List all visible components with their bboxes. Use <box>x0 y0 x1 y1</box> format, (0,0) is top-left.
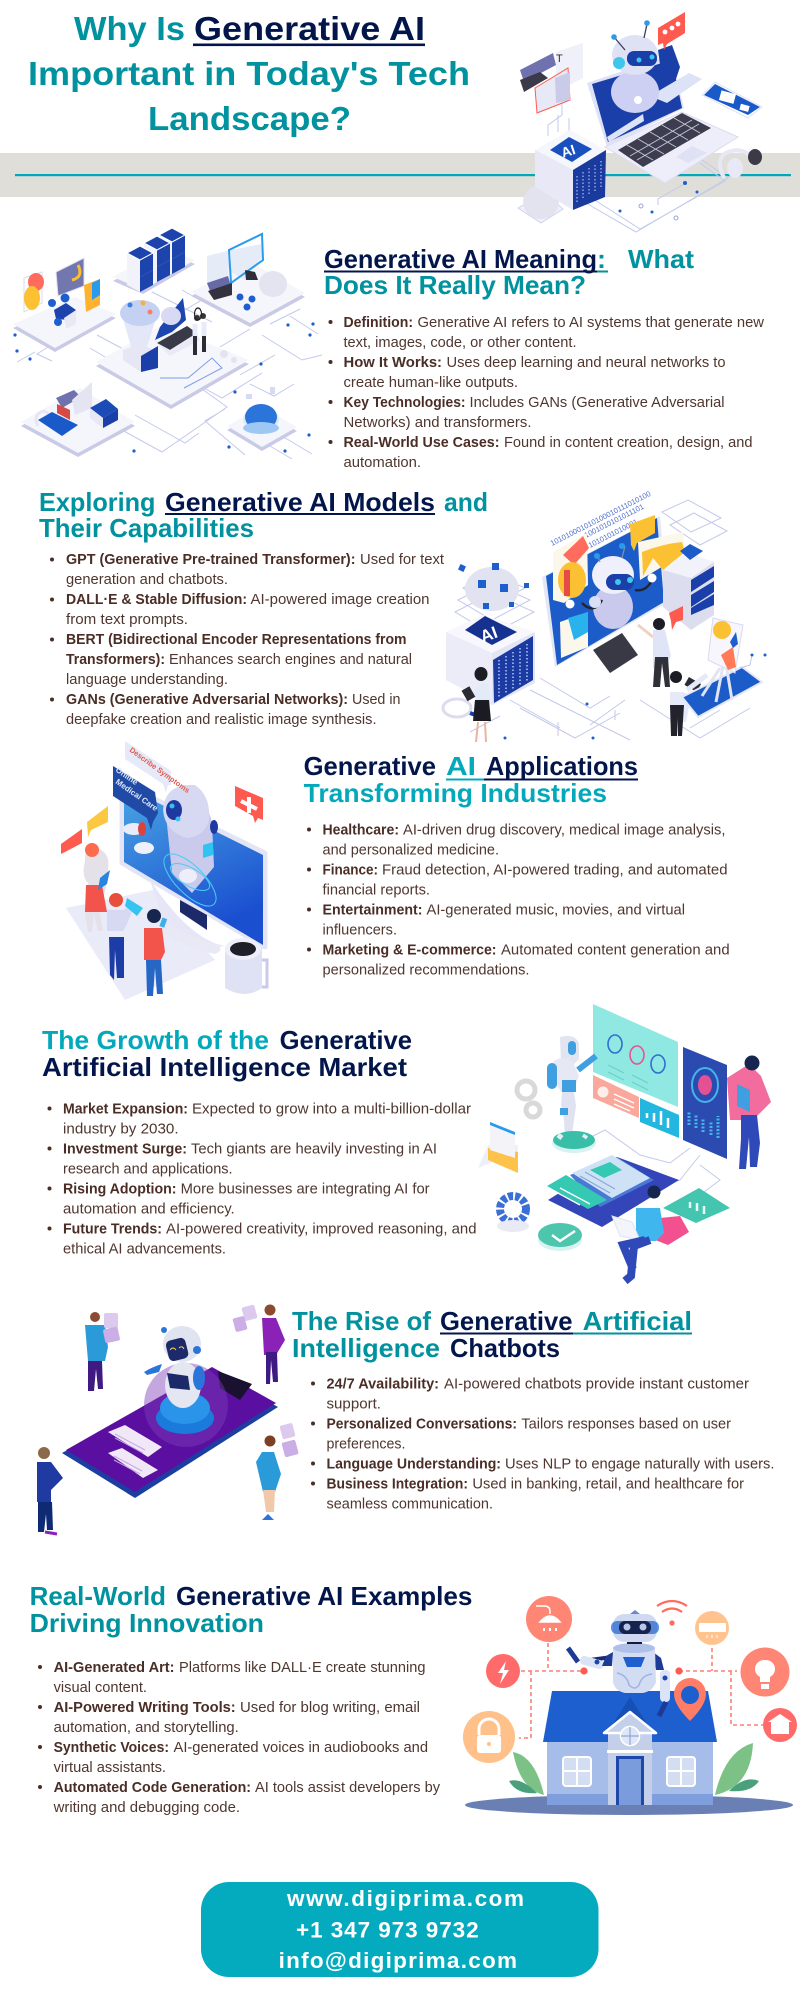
section 5 bullet list: preferences. <box>326 1436 406 1452</box>
section 6 bullet list: AI-generated voices in audiobooks and <box>174 1739 428 1756</box>
section 5 bullet list: Business Integration: <box>326 1476 468 1492</box>
section 1 heading: : <box>597 244 606 274</box>
section 2 heading: Their Capabilities <box>39 513 254 543</box>
section 1 bullet list: create human-like outputs. <box>344 374 518 391</box>
section 3 bullet list: Entertainment: <box>322 902 422 918</box>
section 3 illustration: medical robot monitor: Describe Symptoms <box>128 745 191 795</box>
section 1 bullet list: Generative AI refers to AI systems that generate new <box>418 314 764 331</box>
footer contact panel: info@digiprima.com <box>279 1948 517 1973</box>
section 3 illustration: medical robot monitor: Online <box>114 765 140 787</box>
section 2 bullet list: language understanding. <box>66 671 228 688</box>
section 5 heading: Generative <box>440 1306 572 1336</box>
section 5 heading: Intelligence <box>292 1333 440 1363</box>
section 6 bullet list: Used for blog writing, email <box>240 1699 420 1716</box>
section 3 bullet list: personalized recommendations. <box>322 962 530 978</box>
section 1 bullet list <box>328 314 764 471</box>
section 6 bullet list: AI tools assist developers by <box>255 1779 440 1796</box>
section 4 bullet list: Market Expansion: <box>63 1100 188 1118</box>
section 2 illustration: robot screen and AI cube: 1001010101011101 <box>583 502 645 540</box>
footer contact panel: +1 347 973 9732 <box>296 1918 479 1942</box>
section 2 illustration: robot screen and AI cube: 101010001010100010111010100 <box>549 489 652 548</box>
section 6 heading: Generative AI Examples <box>176 1581 472 1611</box>
section 6 heading: Real-World <box>30 1581 166 1611</box>
section 2 heading <box>39 487 488 543</box>
section 1 heading <box>324 244 694 300</box>
section 4 bullet list: industry by 2030. <box>63 1120 179 1138</box>
section 2 heading: Generative AI Models <box>165 487 435 517</box>
section 1 bullet list: Definition: <box>344 314 413 331</box>
title <box>28 10 470 137</box>
section 3 heading: Applications <box>486 751 638 781</box>
section 2 bullet list: deepfake creation and realistic image synthesis. <box>66 711 376 728</box>
section 5 bullet list: 24/7 Availability: <box>326 1376 439 1392</box>
section 4 bullet list: AI-powered creativity, improved reasoning, and <box>166 1220 476 1238</box>
section 3 illustration: medical robot monitor: Medical Care <box>114 777 160 813</box>
section 3 bullet list: influencers. <box>322 922 397 938</box>
section 4 heading: Artificial Intelligence Market <box>42 1052 407 1082</box>
section 6 bullet list: Automated Code Generation: <box>54 1779 251 1796</box>
section 2 bullet list <box>50 551 445 728</box>
section 6 bullet list: AI-Powered Writing Tools: <box>54 1699 236 1716</box>
section 6 heading: Driving Innovation <box>30 1608 264 1638</box>
section 4 heading <box>42 1025 412 1082</box>
section 1 illustration: isometric platforms <box>13 228 322 459</box>
section 2 bullet list: from text prompts. <box>66 611 188 628</box>
section 4 bullet list: ethical AI advancements. <box>63 1240 226 1258</box>
title: Generative AI <box>194 10 425 47</box>
section 6 bullet list: visual content. <box>54 1679 147 1696</box>
section 6 bullet list: automation, and storytelling. <box>54 1719 239 1736</box>
section 4 bullet list: research and applications. <box>63 1160 233 1178</box>
section 6 heading <box>30 1581 472 1638</box>
section 1 heading: What <box>628 244 694 274</box>
section 5 illustration: chatbot phone <box>37 1304 299 1534</box>
section 3 bullet list: Marketing & E-commerce: <box>322 942 496 958</box>
section 6 bullet list: AI-Generated Art: <box>54 1659 174 1676</box>
section 6 bullet list: virtual assistants. <box>54 1759 166 1776</box>
illustration: AI laptop with robot <box>518 12 762 232</box>
section 2 bullet list: Used for text <box>360 551 445 568</box>
section 5 bullet list: Uses NLP to engage naturally with users. <box>505 1456 774 1472</box>
footer contact panel <box>201 1882 598 1977</box>
section 1 bullet list: Uses deep learning and neural networks to <box>446 354 726 371</box>
section 4 bullet list: Future Trends: <box>63 1220 162 1238</box>
section 3 bullet list: Automated content generation and <box>501 942 730 958</box>
section 2 heading: Exploring <box>39 487 156 517</box>
section 3 heading: AI <box>446 751 476 781</box>
section 3 illustration: medical robot monitor <box>61 741 267 1000</box>
section 2 bullet list: AI-powered image creation <box>250 591 430 608</box>
section 5 bullet list: Tailors responses based on user <box>521 1416 731 1432</box>
section 3 heading <box>304 751 638 808</box>
section 1 bullet list: Key Technologies: <box>344 394 466 411</box>
section 4 bullet list: Investment Surge: <box>63 1140 187 1158</box>
section 4 bullet list: Tech giants are heavily investing in AI <box>191 1140 437 1158</box>
section 5 heading: Chatbots <box>450 1333 560 1363</box>
section 1 heading: Generative AI Meaning <box>324 244 597 274</box>
section 5 bullet list <box>311 1376 774 1512</box>
section 5 bullet list: Personalized Conversations: <box>326 1416 517 1432</box>
section 3 bullet list: AI-driven drug discovery, medical image analysis, <box>403 822 726 838</box>
section 3 bullet list: and personalized medicine. <box>322 842 499 858</box>
section 5 bullet list: support. <box>326 1396 381 1412</box>
section 6 bullet list <box>38 1659 440 1816</box>
section 5 heading <box>292 1306 692 1363</box>
section 1 bullet list: automation. <box>344 454 421 471</box>
section 2 bullet list: Transformers): <box>66 651 165 668</box>
section 6 bullet list: Synthetic Voices: <box>54 1739 169 1756</box>
section 1 bullet list: Found in content creation, design, and <box>504 434 752 451</box>
section 1 heading: Does It Really Mean? <box>324 270 586 300</box>
section 1 bullet list: Real-World Use Cases: <box>344 434 500 451</box>
section 2 illustration: robot screen and AI cube: AI <box>478 623 500 647</box>
section 2 bullet list: BERT (Bidirectional Encoder Representations from <box>66 631 406 648</box>
section 3 bullet list: financial reports. <box>322 882 430 898</box>
section 2 bullet list: Used in <box>352 691 400 708</box>
footer contact panel: www.digiprima.com <box>286 1886 524 1911</box>
section 2 bullet list: generation and chatbots. <box>66 571 228 588</box>
section 3 bullet list: Finance: <box>322 862 378 878</box>
section 6 bullet list: writing and debugging code. <box>53 1799 240 1816</box>
section 3 bullet list: Healthcare: <box>322 822 399 838</box>
section 5 bullet list: Language Understanding: <box>326 1456 501 1472</box>
section 5 heading: Artificial <box>583 1306 692 1336</box>
section 4 bullet list: Expected to grow into a multi-billion-dollar <box>192 1100 471 1118</box>
section 2 bullet list: DALL·E & Stable Diffusion: <box>66 591 247 608</box>
section 5 bullet list: AI-powered chatbots provide instant customer <box>444 1376 749 1392</box>
section 4 illustration: robot with dashboards <box>478 1004 771 1281</box>
section 5 heading: The Rise of <box>292 1306 431 1336</box>
section 4 bullet list: Rising Adoption: <box>63 1180 176 1198</box>
section 1 bullet list: text, images, code, or other content. <box>344 334 576 351</box>
section 3 heading: Generative <box>304 751 436 781</box>
section 3 bullet list <box>307 822 730 978</box>
illustration: AI laptop with robot: T <box>556 53 563 65</box>
section 1 bullet list: How It Works: <box>344 354 442 371</box>
section 2 heading: and <box>444 487 488 517</box>
section 4 bullet list <box>48 1100 476 1258</box>
section 3 bullet list: Fraud detection, AI-powered trading, and automated <box>382 862 728 878</box>
section 4 heading: The Growth of the <box>42 1025 269 1055</box>
section 2 bullet list: GANs (Generative Adversarial Networks): <box>66 691 348 708</box>
header band <box>0 153 800 197</box>
section 3 bullet list: AI-generated music, movies, and virtual <box>426 902 685 918</box>
section 2 bullet list: Enhances search engines and natural <box>169 651 412 668</box>
section 6 illustration: smart home with robot <box>463 1596 797 1815</box>
section 5 bullet list: seamless communication. <box>326 1496 493 1512</box>
title: Important in Today's Tech <box>28 55 470 92</box>
section 3 heading: Transforming Industries <box>304 778 607 808</box>
section 2 illustration: robot screen and AI cube: 1010101010001 <box>587 517 639 550</box>
section 2 bullet list: GPT (Generative Pre-trained Transformer): <box>66 551 356 568</box>
section 5 bullet list: Used in banking, retail, and healthcare for <box>472 1476 744 1492</box>
section 2 illustration: robot screen and AI cube <box>443 489 766 742</box>
section 4 bullet list: More businesses are integrating AI for <box>181 1180 430 1198</box>
section 1 bullet list: Includes GANs (Generative Adversarial <box>470 394 724 411</box>
section 1 bullet list: Networks) and transformers. <box>344 414 532 431</box>
title: Landscape? <box>148 100 351 137</box>
section 6 bullet list: Platforms like DALL·E create stunning <box>179 1659 426 1676</box>
section 4 bullet list: automation and efficiency. <box>63 1200 235 1218</box>
illustration: AI laptop with robot: AI <box>559 141 577 161</box>
section 4 heading: Generative <box>280 1025 412 1055</box>
title: Why Is <box>74 10 185 47</box>
